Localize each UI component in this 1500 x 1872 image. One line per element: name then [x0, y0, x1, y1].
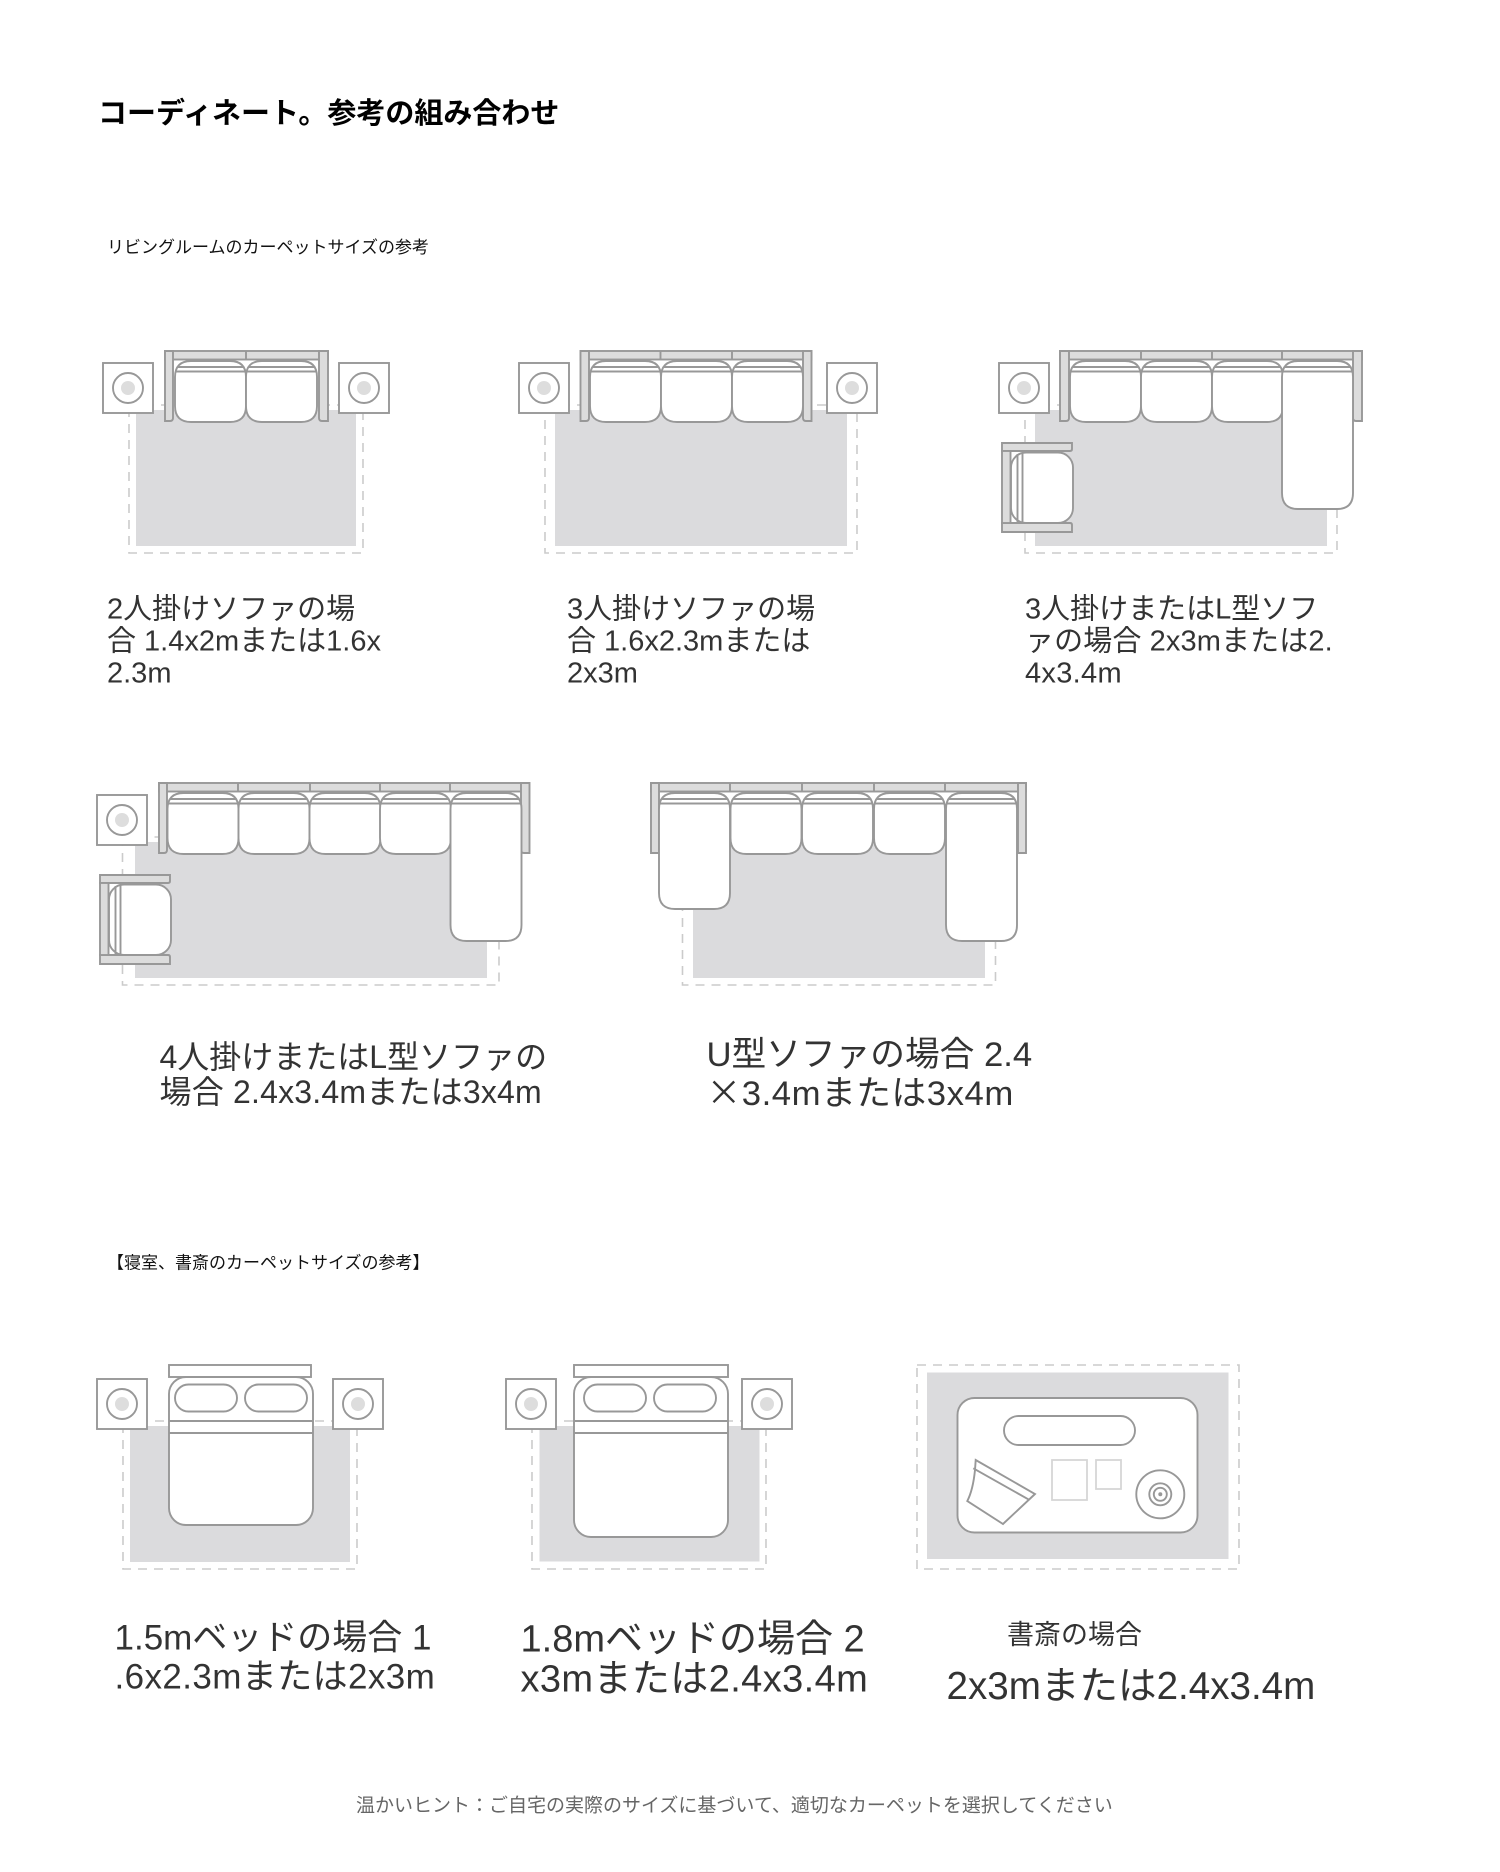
diagram: three-seat sofa — [519, 351, 877, 553]
diagram: 1.8m bed — [506, 1365, 792, 1569]
caption: 1.8m bed: 1.8mベッドの場合 2 — [520, 1618, 865, 1660]
caption: 1.8m bed — [520, 1618, 868, 1700]
caption: three-seat or L sofa: 3人掛けまたはL型ソフ — [1025, 592, 1318, 626]
diagram: two-seat sofa — [103, 351, 389, 553]
diagram: four-seat L sofa with armchair — [97, 783, 530, 985]
caption: U-shaped sofa: ×3.4mまたは3x4m — [706, 1065, 1014, 1115]
footer hint: 温かいヒント：ご自宅の実際のサイズに基づいて、適切なカーペットを選択してください — [356, 1794, 1113, 1816]
caption: two-seat sofa: 2人掛けソファの場 — [107, 592, 355, 626]
caption: study: 2x3mまたは2.4x3.4m — [946, 1665, 1315, 1708]
caption: 1.5m bed: .6x2.3mまたは2x3m — [114, 1658, 435, 1696]
diagram: three-seat L sofa with armchair — [999, 351, 1362, 553]
caption: four-seat or L sofa: 場合 2.4x3.4mまたは3x4m — [160, 1074, 542, 1110]
caption: three-seat or L sofa: ァの場合 2x3mまたは2. — [1025, 624, 1333, 658]
caption: three-seat or L sofa: 4x3.4m — [1025, 658, 1122, 690]
title: コーディネート。参考の組み合わせ — [98, 96, 559, 130]
caption: study — [946, 1620, 1315, 1708]
caption: 1.8m bed: x3mまたは2.4x3.4m — [520, 1658, 868, 1700]
caption: three-seat sofa — [567, 592, 815, 690]
diagram: U-shaped sofa — [651, 783, 1026, 985]
caption: 1.5m bed: 1.5mベッドの場合 1 — [114, 1618, 432, 1658]
caption: two-seat sofa: 合 1.4x2mまたは1.6x — [107, 624, 381, 658]
heading: bedroom and study: 【寝室、書斎のカーペットサイズの参考】 — [107, 1254, 430, 1272]
caption: two-seat sofa: 2.3m — [107, 658, 171, 690]
caption: U-shaped sofa: U型ソファの場合 2.4 — [706, 1036, 1032, 1074]
caption: two-seat sofa — [107, 592, 381, 690]
heading: living room: リビングルームのカーペットサイズの参考 — [107, 238, 429, 257]
diagram: 1.5m bed — [97, 1365, 383, 1569]
caption: three-seat sofa: 合 1.6x2.3mまたは — [567, 624, 810, 658]
caption: U-shaped sofa — [706, 1036, 1032, 1115]
caption: three-seat or L sofa — [1025, 592, 1333, 690]
caption: three-seat sofa: 3人掛けソファの場 — [567, 592, 815, 626]
caption: 1.5m bed — [114, 1618, 435, 1696]
caption: study: 書斎の場合 — [1007, 1620, 1142, 1650]
diagram: study desk — [917, 1365, 1239, 1569]
caption: four-seat or L sofa — [160, 1039, 547, 1110]
caption: four-seat or L sofa: 4人掛けまたはL型ソファの — [160, 1039, 547, 1075]
caption: three-seat sofa: 2x3m — [567, 658, 638, 690]
